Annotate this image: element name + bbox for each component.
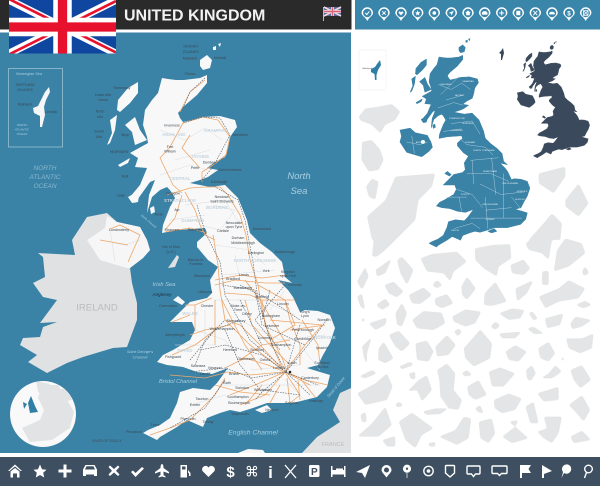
labels: islands: Arran (155, 212, 163, 216)
labels: country names (76, 128, 345, 448)
icon: star (34, 464, 46, 478)
icon: ring target (424, 466, 433, 476)
labels: islands: HEBRIDES (110, 150, 129, 154)
labels: cities: Aberdeen (232, 133, 248, 137)
icon: map pin (382, 465, 392, 478)
icon: command: ⌘ (245, 464, 259, 480)
labels: cities: Bristol (229, 372, 239, 376)
Isle of Man (168, 255, 179, 268)
Great Britain landmass (107, 43, 335, 440)
labels: cities: Nottingham (262, 314, 280, 318)
labels: seas: Sea (291, 186, 307, 197)
county names: STRATHCLYDE (449, 117, 465, 120)
labels: cities: Bournemouth (228, 401, 250, 405)
labels: seas: OCEAN (33, 183, 57, 190)
labels: seas: Saint George's (127, 349, 153, 354)
labels: seas: English Channel (228, 430, 278, 436)
labels: country names: DUMFRIES (182, 218, 205, 223)
labels: cities: Grimsby (288, 283, 302, 287)
labels: islands: Stornoway (114, 86, 131, 90)
labels: cities: Exeter (190, 403, 201, 407)
labels: cities: Carlisle (217, 229, 229, 233)
labels: country names: NORTH YORKSHIRE (234, 258, 276, 263)
icon: parking: P (311, 467, 318, 478)
labels: cities: Glasgow (166, 192, 180, 196)
labels: cities: Chester (201, 304, 214, 308)
labels: seas: North (287, 171, 311, 182)
county names: DEVON (451, 230, 459, 232)
labels: seas: Channel (133, 354, 148, 360)
icon: flag (520, 465, 531, 478)
icon: crossed cutlery (285, 465, 296, 478)
labels: cities: Saint Andrews (219, 168, 242, 172)
shetland inset: ATLANTIC (14, 128, 30, 132)
labels: cities: Fishguard (165, 355, 181, 359)
shetland inset card: Mainland (363, 68, 372, 70)
icon: fuel pump (180, 465, 190, 478)
labels: cities: Leeds (239, 273, 249, 277)
labels: cities: Hereford (223, 348, 237, 352)
labels: seas: Strait of Dover (326, 375, 346, 398)
Channel Islands patch (238, 449, 265, 453)
labels: cities: Newport (208, 366, 222, 370)
labels: cities: Plymouth (181, 417, 195, 421)
dark silhouette map of UK (499, 42, 590, 158)
labels: cities: Norwich (318, 318, 330, 322)
labels: cities: Trent (234, 308, 242, 312)
labels: cities: Derby (242, 312, 252, 316)
labels: islands: ORKNEY (183, 44, 199, 48)
county names: DERBYSHIRE (483, 171, 498, 173)
county names: DUMFRIES (451, 130, 463, 132)
county names: SUFFOLK (515, 199, 526, 201)
labels: country names: HIGHLAND (162, 132, 186, 137)
France landmass (302, 388, 351, 453)
county names: OXFORDSHIRE (482, 204, 499, 206)
county names: BORDERS (463, 123, 474, 125)
labels: cities: Dundee (203, 160, 215, 164)
title bar (0, 0, 352, 30)
labels: cities: Scarborough (275, 250, 295, 254)
shetland inset: Lerwick (45, 110, 57, 114)
county names: GRAMPIAN (462, 80, 474, 83)
county names: SUSSEX (486, 219, 495, 221)
locator globe (10, 381, 76, 447)
labels: islands: Uist (96, 135, 102, 139)
labels: country names: IRELAND (76, 302, 118, 314)
labels: islands: Mull (122, 174, 128, 178)
shetland inset card (359, 50, 386, 90)
labels: cities: Londonderry (109, 228, 129, 232)
labels: cities: Edinburgh (211, 180, 227, 184)
labels: seas: Bristol Channel (159, 379, 198, 385)
labels: cities: Winchester (254, 388, 273, 392)
labels: cities: Canterbury (301, 376, 319, 380)
blue county map of UK (400, 39, 530, 247)
icon: magnifier (584, 465, 592, 478)
labels: cities: London (273, 366, 285, 370)
railway lines (170, 78, 328, 428)
labels: country names: BORDERS (206, 205, 228, 210)
flag of the United Kingdom (9, 0, 116, 54)
labels: cities: Bradford (226, 277, 240, 281)
labels: islands: ISLES OF SCILLY (92, 439, 122, 443)
labels: cities: Coventry (258, 336, 272, 340)
labels: cities: Newtown (215, 195, 229, 199)
icon: lollipop pin (562, 464, 571, 478)
icon: information: i (268, 463, 273, 482)
road network (100, 80, 328, 435)
county names: LINCOLNSHIRE (502, 183, 519, 185)
labels: cities: Durham (232, 236, 244, 240)
labels: seas: Anglesey (152, 292, 172, 297)
shetland inset (8, 68, 62, 147)
icon: plane (155, 464, 169, 478)
panel: marker bar (355, 0, 600, 30)
labels: islands: Islay (117, 194, 125, 198)
labels: cities: Southampton (227, 395, 249, 399)
labels: cities: Inverness (164, 124, 180, 128)
labels: cities: upon Tyne (226, 225, 242, 229)
Ireland landmass (20, 213, 150, 373)
labels: seas (29, 165, 346, 436)
county names: NORFOLK (517, 191, 528, 193)
shetland inset: ISLANDS (17, 88, 33, 92)
labels: cities: -on-Sea (316, 365, 328, 369)
icon: cross (108, 466, 120, 476)
Northern Ireland (87, 216, 150, 268)
labels: cities: Weymouth (231, 412, 249, 416)
labels: country names: GRAMPIAN (204, 128, 228, 133)
labels: cities: Aberystwyth (165, 333, 185, 337)
icon: heart (202, 466, 215, 477)
shetland inset: NORTH (17, 123, 28, 127)
London marker (289, 371, 291, 373)
labels: islands (92, 44, 226, 443)
labels: country names: STRATHCLYDE (164, 198, 196, 203)
labels: cities: Peterborough (292, 328, 314, 332)
labels: cities: Sheffield (255, 295, 269, 299)
panel: main map (0, 32, 351, 453)
shetland inset: Norwegian Sea (16, 72, 42, 76)
county names: ANTRIM (416, 141, 424, 144)
labels: islands: Harris (98, 98, 108, 102)
labels: islands: ISLANDS (183, 50, 199, 54)
icon: wide speech bubble (492, 466, 507, 476)
county names: POWYS (461, 194, 470, 196)
labels: cities: Barrow-in- (188, 258, 205, 262)
labels: seas: ATLANTIC (29, 174, 61, 181)
icon: plus (58, 464, 72, 478)
labels: cities: Lynn (301, 314, 309, 318)
labels: country names: TAYSIDE (191, 154, 209, 159)
labels: cities: Lincoln (277, 302, 289, 306)
labels: cities: Fort (167, 145, 173, 149)
labels: cities: Swansea (191, 364, 205, 368)
labels: cities (109, 72, 330, 434)
labels: cities: Liverpool (198, 290, 212, 294)
labels: cities: Kingston (281, 270, 295, 274)
icon: dollar: $ (226, 464, 235, 481)
labels: cities: Bath (223, 381, 231, 385)
title text: UNITED KINGDOM (124, 8, 265, 24)
icon: check (131, 467, 144, 477)
labels: islands: Uist (97, 115, 103, 119)
labels: country names: NORFOLK (314, 335, 337, 340)
icon: home (8, 464, 22, 478)
labels: country names: FRANCE (322, 442, 345, 448)
labels: islands: Kirkwall (214, 56, 226, 60)
marker icons: $ (567, 10, 571, 17)
shetland inset: Mainland (18, 102, 32, 106)
labels: cities: upon Hull (280, 274, 296, 278)
icon: bed (331, 466, 346, 477)
labels: cities: Furness (190, 262, 203, 266)
labels: cities: Sunderland (253, 227, 271, 231)
labels: cities: King's (300, 310, 310, 314)
icon: needle pin (403, 465, 411, 478)
labels: cities: Leicester (265, 324, 280, 328)
labels: cities: Darlington (248, 251, 264, 255)
labels: cities: Blackpool (194, 274, 210, 278)
icon: car (83, 465, 97, 476)
labels: cities: Northampton (271, 343, 291, 347)
labels: cities: Dumfries (188, 228, 202, 232)
labels: cities: Taunton (196, 397, 208, 401)
labels: islands: South (94, 130, 104, 134)
county names (416, 80, 528, 232)
labels: country names: WALES (182, 311, 198, 316)
icon bar (0, 457, 600, 486)
county borders (100, 128, 325, 405)
labels: cities: Newcastle (226, 221, 242, 225)
labels: cities: Caernarfon (159, 304, 177, 308)
labels: islands: North (96, 110, 104, 114)
county names: SOMERSET (452, 217, 465, 219)
labels: islands: Skye (121, 133, 129, 137)
labels: islands: Lewis with (95, 93, 111, 97)
labels: seas: North Channel (140, 213, 158, 229)
icon: square marker (446, 466, 454, 477)
county names: TAYSIDE (454, 94, 464, 97)
labels: cities: Thurso (184, 72, 196, 76)
Lough Neagh (421, 140, 425, 144)
labels: cities: Penzance (126, 430, 142, 434)
labels: country names: CENTRAL (170, 176, 191, 181)
county names: DURHAM (465, 141, 475, 144)
county borders (406, 76, 525, 229)
shetland inset: SHETLAND (15, 83, 35, 87)
labels: islands: (U.K.) (166, 250, 176, 254)
labels: cities: Perth (191, 166, 199, 170)
labels: cities: Newport (265, 408, 279, 412)
labels: cities: Stoke-on- (230, 304, 247, 308)
small flag icon (323, 7, 341, 21)
county names: NORTH YORKSHIRE (473, 150, 495, 152)
labels: cities: Manchester (234, 286, 253, 290)
labels: cities: Stratford (250, 348, 264, 352)
county blank shapes (357, 104, 594, 448)
shetland inset: OCEAN (17, 132, 28, 136)
labels: cities: Cardiff (200, 372, 210, 376)
county names: HIGHLAND (440, 83, 452, 86)
icon: pennant (542, 465, 552, 478)
labels: cities: Saint Boswells (210, 200, 234, 204)
labels: cities: Brighton (285, 401, 299, 405)
labels: cities: Ayr (174, 208, 180, 212)
labels: cities: Stranraer (165, 228, 180, 232)
labels: cities: Shrewsbury (227, 319, 246, 323)
labels: cities: Gloucester (237, 357, 255, 361)
labels: cities: Southend (314, 361, 330, 365)
icon: navigation arrow (356, 465, 370, 478)
icon: speech bubble (467, 466, 480, 476)
labels: cities: Ipswich (316, 346, 328, 350)
labels: cities: Truro (151, 423, 159, 427)
labels: islands: Mainland (183, 56, 197, 60)
labels: cities: Torbay (203, 420, 214, 424)
labels: seas: Irish Sea (153, 282, 176, 288)
labels: cities: Wolverhampton (209, 327, 235, 331)
labels: country names: DYFED (178, 348, 192, 353)
labels: cities: Cambridge (294, 337, 312, 341)
icon: parking (309, 465, 320, 478)
labels: cities: Hastings (309, 399, 323, 403)
labels: cities: Middlesbrough (231, 241, 255, 245)
labels: seas: NORTH (34, 165, 57, 172)
labels: cities: William (164, 150, 176, 154)
labels: cities: Swindon (235, 386, 249, 390)
marker icons (362, 7, 591, 21)
labels: islands: Isle of Man (162, 245, 180, 249)
labels: cities: Luton (288, 361, 296, 365)
labels: cities: Oxford (260, 358, 270, 362)
labels: cities: York (262, 269, 270, 273)
